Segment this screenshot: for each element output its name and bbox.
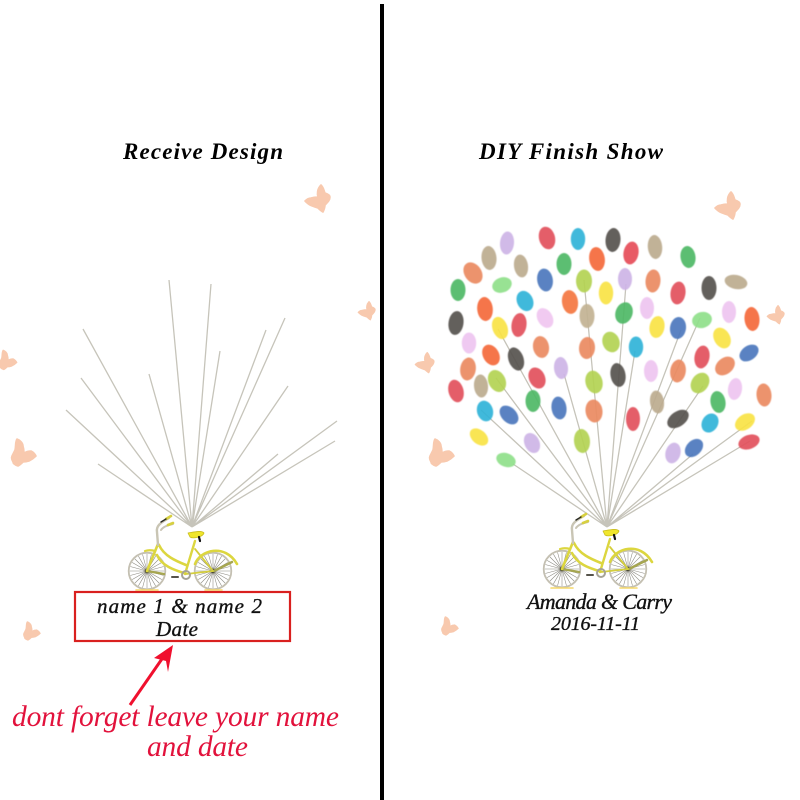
note: dont forget leave your name and date: dont forget leave your name xyxy=(12,701,339,733)
red name and date box xyxy=(75,592,290,641)
placeholder: name 1 & name 2: name 1 & name 2 xyxy=(97,594,262,618)
wedding date: 2016-11-11 xyxy=(551,613,640,635)
heading: DIY Finish Show: DIY Finish Show xyxy=(478,139,664,164)
butterflies: right panel xyxy=(415,192,784,635)
note: dont forget leave your name and date xyxy=(12,701,339,763)
fingerprint balloons xyxy=(446,225,772,470)
heading: Receive Design: Receive Design xyxy=(122,139,283,164)
divider line xyxy=(380,4,384,800)
bicycle illustration: right xyxy=(544,514,652,588)
couple names: Amanda & Carry xyxy=(525,589,672,614)
empty balloon strings: left xyxy=(66,280,337,527)
placeholder: date: Date xyxy=(155,617,198,641)
note: dont forget leave your name and date: and date xyxy=(147,731,248,763)
balloon strings: right xyxy=(481,280,752,527)
butterflies: left panel xyxy=(0,185,375,640)
red arrow to the box xyxy=(130,645,173,705)
bicycle illustration: left xyxy=(129,516,237,590)
